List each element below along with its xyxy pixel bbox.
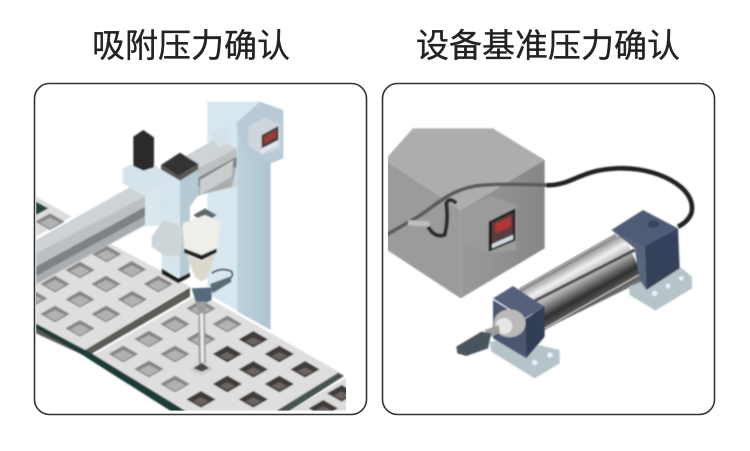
tray: upper left bbox=[18, 197, 190, 357]
piston rod and clevis bbox=[456, 325, 500, 356]
black motor on carriage bbox=[123, 130, 162, 197]
title: equipment reference pressure check: 设备基准压力确认 bbox=[416, 27, 680, 64]
tray: lower centre bbox=[85, 293, 356, 417]
horizontal beam bbox=[36, 125, 237, 285]
title: suction pressure check: 吸附压力确认 bbox=[92, 27, 290, 64]
front mount and end block bbox=[490, 286, 560, 378]
suction head bbox=[183, 208, 232, 303]
grey box tank bbox=[385, 128, 545, 298]
illustration: gantry over trays with vacuum nozzle bbox=[18, 102, 356, 417]
pressure gauge on box bbox=[488, 198, 516, 252]
illustration: tank, gauge and cylinder bbox=[385, 128, 692, 378]
cylinder barrel bbox=[520, 233, 645, 330]
hose from box to cylinder bbox=[386, 168, 692, 236]
rear mount and end block bbox=[611, 210, 692, 311]
gantry column left face bbox=[207, 102, 260, 312]
panel: suction pressure bbox=[18, 84, 366, 417]
vertical slide unit bbox=[145, 153, 198, 283]
gantry column right face and gauge bbox=[236, 102, 283, 330]
nozzle shaft and cup bbox=[188, 302, 214, 376]
panel: equipment pressure bbox=[382, 84, 714, 414]
